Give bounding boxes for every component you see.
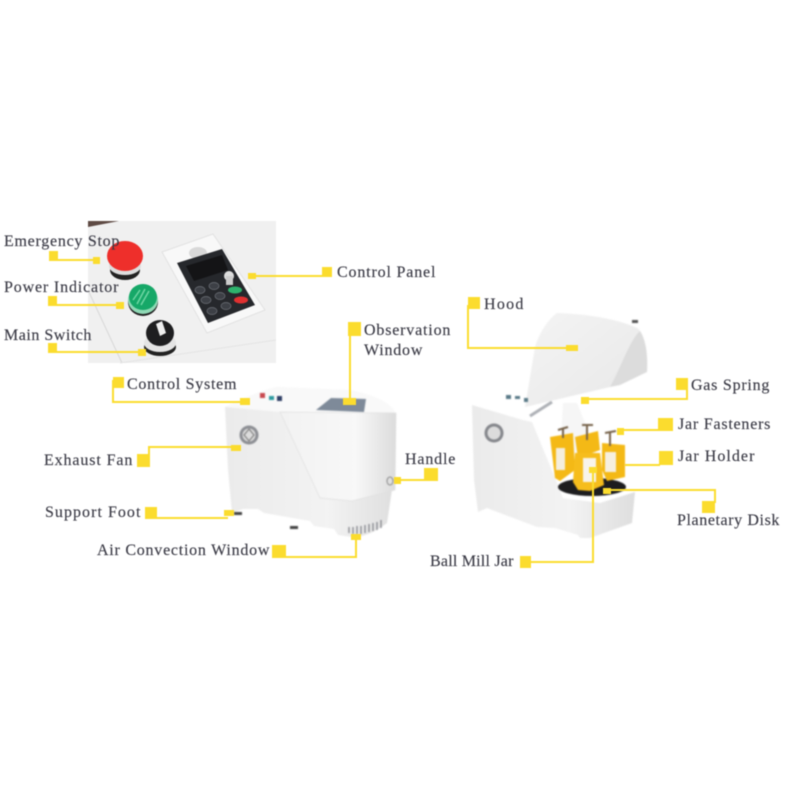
label: Observation Window xyxy=(343,322,451,405)
label: Control System: Control System xyxy=(127,376,237,393)
label: Jar Fasteners: Jar Fasteners xyxy=(678,416,771,433)
panel: control close-up photo xyxy=(4,221,780,570)
planetary disk xyxy=(558,478,626,496)
machine base xyxy=(472,405,635,538)
label: Control System xyxy=(113,376,250,405)
label: Emergency Stop xyxy=(4,233,120,264)
label: Observation Window: Window xyxy=(364,342,423,359)
label: Control Panel: Control Panel xyxy=(337,264,436,281)
label: Emergency Stop: Emergency Stop xyxy=(4,233,120,250)
observation window xyxy=(316,398,366,412)
control buttons xyxy=(260,393,282,401)
hood xyxy=(525,313,647,407)
label: Hood xyxy=(468,296,578,351)
top face xyxy=(225,387,396,414)
label: Jar Holder: Jar Holder xyxy=(678,448,755,465)
label: Power Indicator: Power Indicator xyxy=(4,279,119,296)
label: Jar Holder xyxy=(625,448,755,465)
label: Air Convection Window: Air Convection Window xyxy=(97,542,270,559)
label: Jar Fasteners xyxy=(617,416,771,435)
icon: exhaust fan grille xyxy=(240,426,258,444)
control buttons xyxy=(506,395,528,402)
support column xyxy=(560,403,598,460)
label: Support Foot: Support Foot xyxy=(45,504,141,521)
label: Air Convection Window xyxy=(97,534,361,559)
label: Gas Spring: Gas Spring xyxy=(691,377,770,394)
label: Power Indicator xyxy=(4,279,124,309)
icon: power indicator light xyxy=(128,284,158,316)
icon: exhaust fan grille xyxy=(484,424,504,442)
label: Handle xyxy=(394,451,456,484)
label: Exhaust Fan: Exhaust Fan xyxy=(44,452,133,469)
control panel keypad xyxy=(162,234,265,333)
feet xyxy=(234,512,298,529)
machine body xyxy=(225,387,396,537)
label: Handle: Handle xyxy=(405,451,456,468)
label: Control Panel xyxy=(248,264,436,281)
label: Hood: Hood xyxy=(484,296,524,313)
label: Ball Mill Jar xyxy=(430,467,597,570)
air vents xyxy=(349,520,381,534)
label: Observation Window: Observation xyxy=(364,322,451,339)
label: Ball Mill Jar: Ball Mill Jar xyxy=(430,553,514,570)
icon: emergency stop button xyxy=(107,241,143,280)
panel: closed machine xyxy=(225,387,396,537)
door panel xyxy=(280,412,396,501)
label: Support Foot xyxy=(45,504,234,521)
label: Main Switch xyxy=(4,327,146,356)
ball mill jars xyxy=(550,425,625,491)
label: Exhaust Fan xyxy=(44,445,241,469)
panel: open machine xyxy=(472,313,647,538)
label: Main Switch: Main Switch xyxy=(4,327,92,344)
handle xyxy=(387,477,393,485)
label: Planetary Disk xyxy=(603,488,780,529)
icon: main switch knob xyxy=(144,320,176,356)
label: Gas Spring xyxy=(581,377,770,404)
label: Planetary Disk: Planetary Disk xyxy=(677,512,780,529)
